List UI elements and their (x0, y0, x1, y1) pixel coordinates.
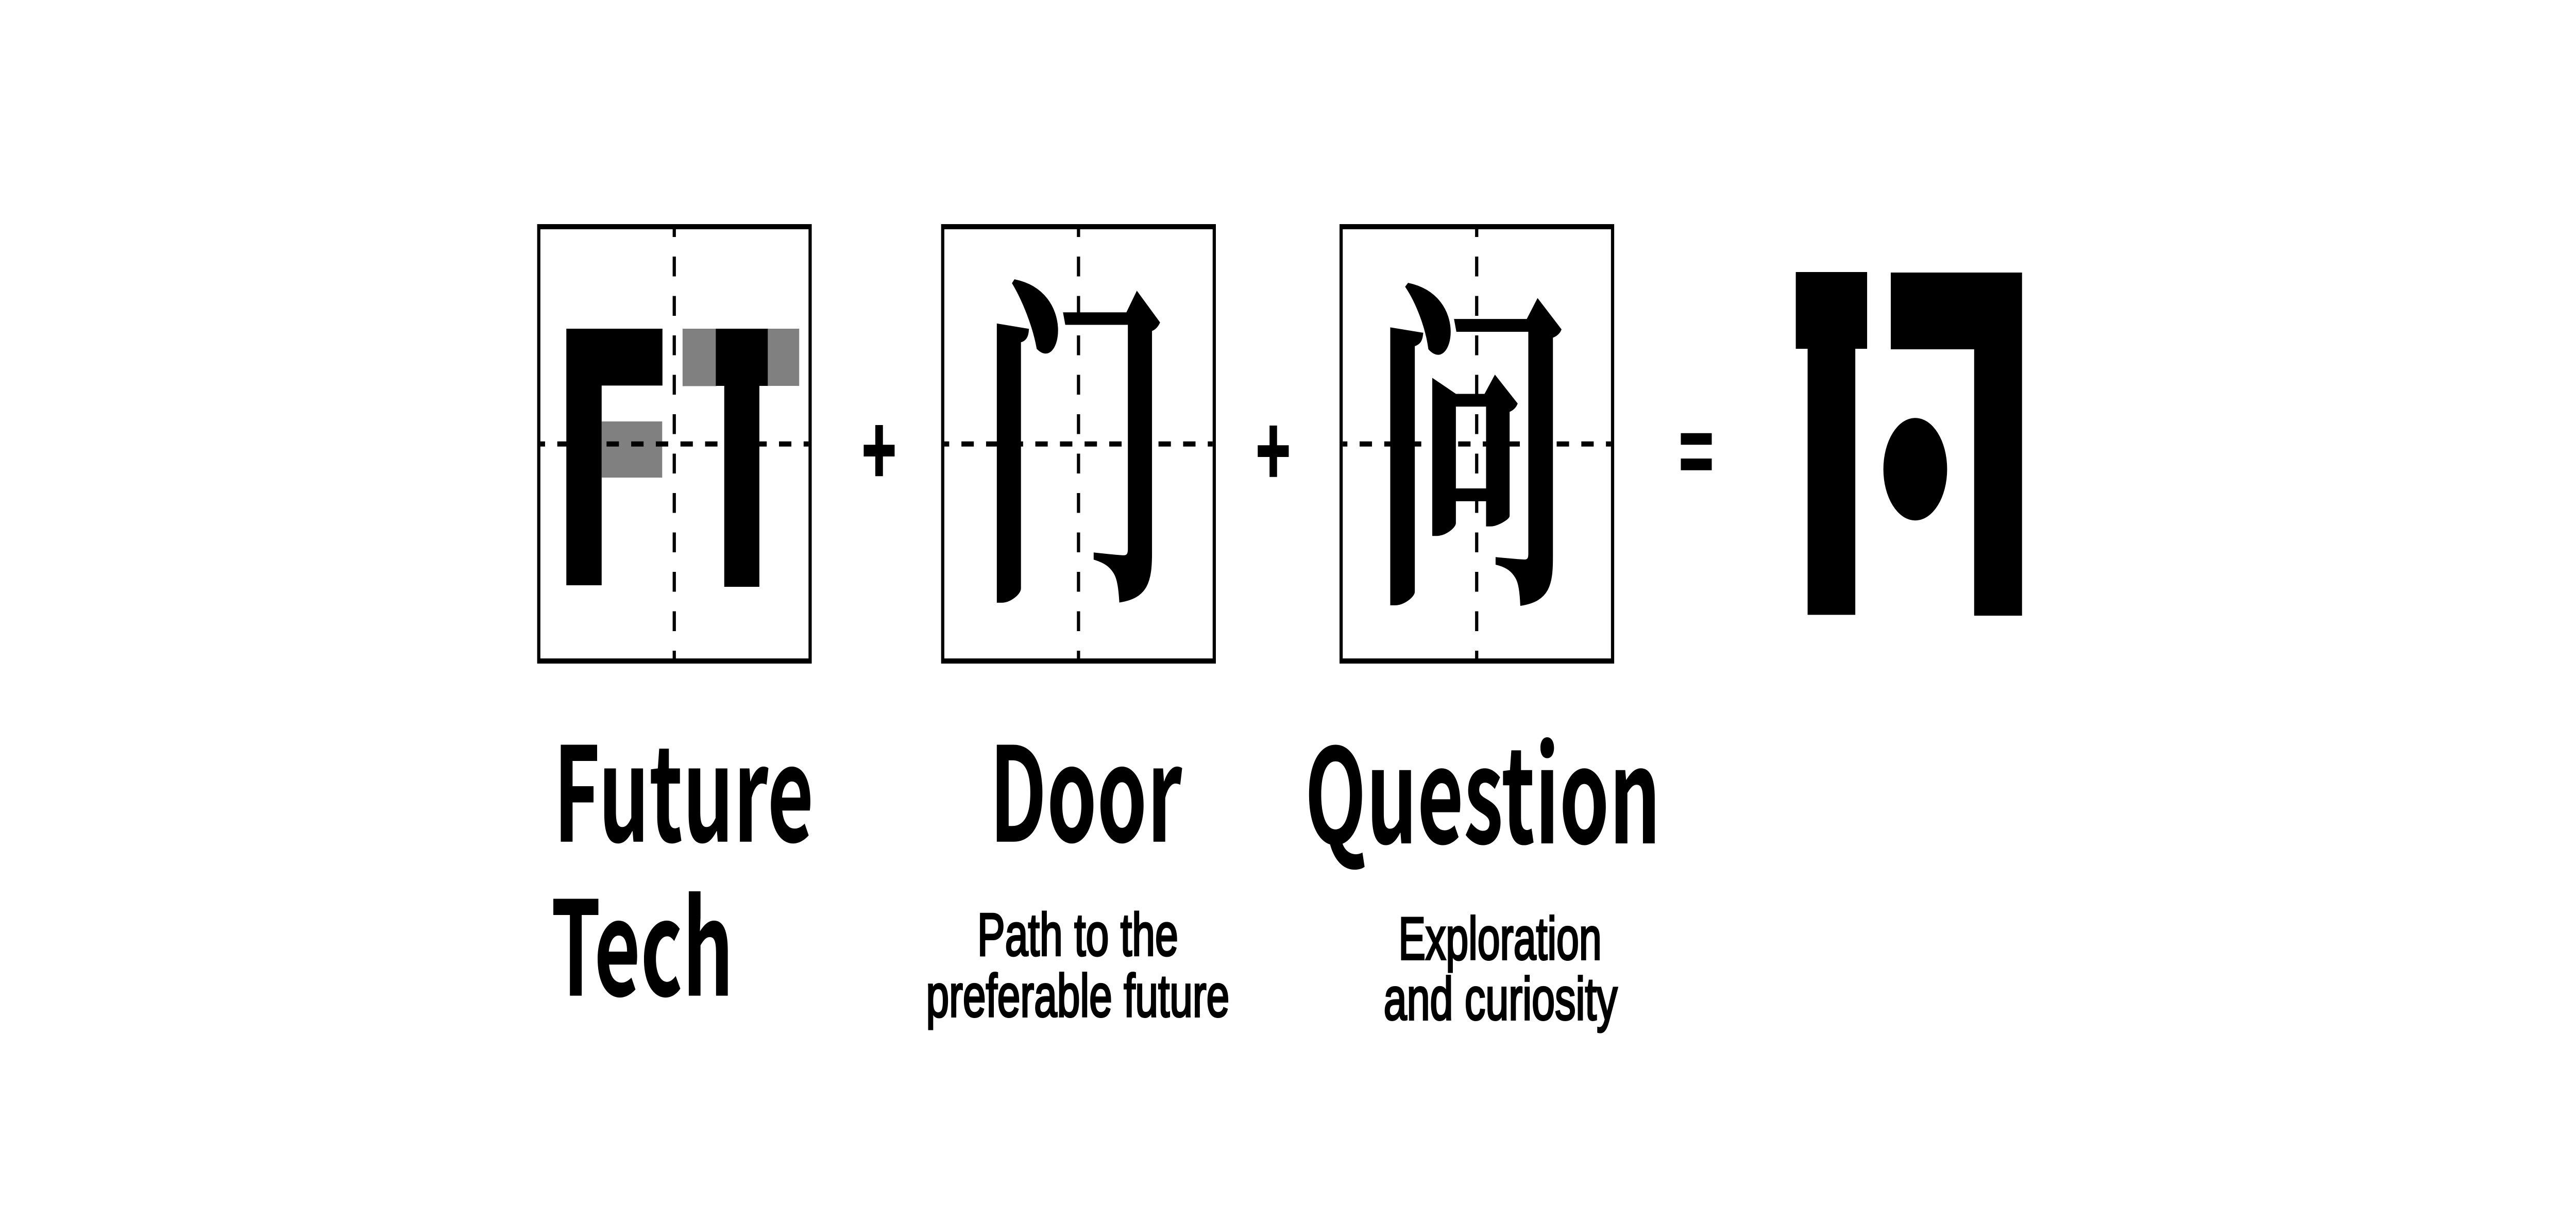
text: question description (1384, 905, 1618, 1032)
panel: door character grid (943, 181, 1214, 669)
plus sign 1 (863, 425, 894, 476)
panel: question character grid (1341, 183, 1613, 672)
logo mark (1796, 272, 2022, 616)
letter F (566, 329, 663, 585)
text: question description: Exploration (1398, 905, 1602, 972)
heading: Door: Door (990, 690, 1182, 879)
equals sign (1681, 433, 1711, 470)
grey letter parts (602, 329, 799, 478)
text: door description: Path to the (977, 901, 1178, 969)
text: question description: and curiosity (1384, 965, 1618, 1032)
question character: 问 (1371, 183, 1573, 672)
plus sign 2 (1258, 426, 1289, 477)
door character: 门 (978, 181, 1171, 669)
heading: Future Tech (551, 690, 814, 1033)
letter T (716, 329, 768, 587)
text: door description (926, 901, 1229, 1029)
text: door description: preferable future (926, 962, 1229, 1029)
heading: Future Tech: Future (553, 690, 814, 879)
heading: Question: Question (1304, 691, 1660, 881)
heading: Future Tech: Tech (551, 844, 734, 1033)
panel: FT letters grid (539, 227, 810, 661)
